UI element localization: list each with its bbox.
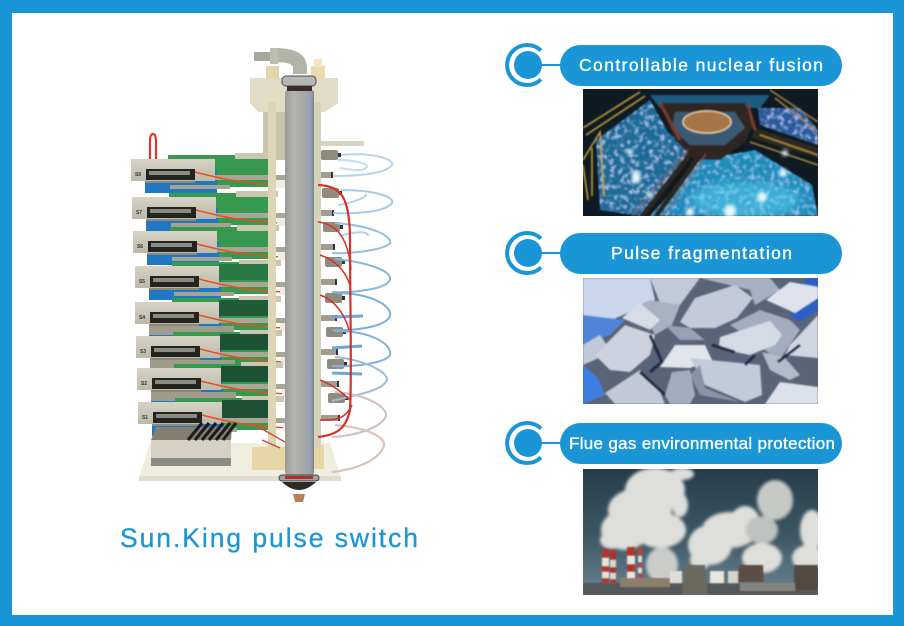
pill heading: Pulse fragmentation bbox=[611, 243, 792, 263]
board 6: S6 bbox=[137, 244, 143, 250]
top mounting block bbox=[250, 59, 364, 146]
board 2: S2 bbox=[141, 381, 147, 387]
pill heading bbox=[560, 45, 842, 86]
board 8 bbox=[131, 150, 341, 193]
support rods bbox=[268, 102, 321, 452]
board 4: S4 bbox=[139, 315, 145, 321]
main steel tube bbox=[285, 90, 314, 475]
board 5: S5 bbox=[139, 279, 145, 285]
red signal wires bbox=[255, 185, 352, 448]
icon: ring bullet bbox=[507, 45, 562, 85]
blue coolant tubing bbox=[332, 154, 392, 472]
board 8: S8 bbox=[135, 172, 141, 178]
board 3: S3 bbox=[140, 349, 146, 355]
icon: ring bullet bbox=[507, 423, 562, 463]
item: pulse fragmentation bbox=[507, 233, 842, 404]
red return wire loop bbox=[150, 134, 156, 159]
item: controllable nuclear fusion bbox=[507, 45, 842, 218]
board 1: S1 bbox=[142, 415, 148, 421]
foot blocks bbox=[252, 445, 324, 470]
pill heading: Controllable nuclear fusion bbox=[579, 55, 823, 75]
photo: smokestacks bbox=[583, 468, 824, 595]
board 5 bbox=[135, 257, 345, 300]
item: flue gas environmental protection bbox=[507, 423, 842, 595]
board 1 bbox=[138, 393, 348, 436]
driver box bbox=[151, 423, 236, 466]
icon: ring bullet bbox=[507, 233, 562, 273]
board 2 bbox=[137, 359, 347, 402]
board 7: S7 bbox=[136, 210, 142, 216]
photo: fusion machine bbox=[583, 89, 818, 218]
board 7 bbox=[132, 188, 342, 231]
top clamp bbox=[282, 76, 316, 91]
pill heading bbox=[560, 423, 842, 464]
board 6 bbox=[133, 222, 343, 265]
board 3 bbox=[136, 327, 346, 370]
pill heading: Flue gas environmental protection bbox=[569, 434, 835, 453]
pulse switch photo illustration bbox=[131, 48, 392, 502]
base plate bbox=[139, 443, 341, 481]
board 4 bbox=[135, 293, 345, 336]
elbow fitting bbox=[254, 48, 300, 74]
photo: silicon fragments bbox=[583, 278, 818, 404]
rear column bbox=[263, 110, 293, 160]
pill heading bbox=[560, 233, 842, 274]
product caption: Sun.King pulse switch bbox=[120, 523, 418, 553]
bottom clamp bbox=[279, 475, 319, 502]
